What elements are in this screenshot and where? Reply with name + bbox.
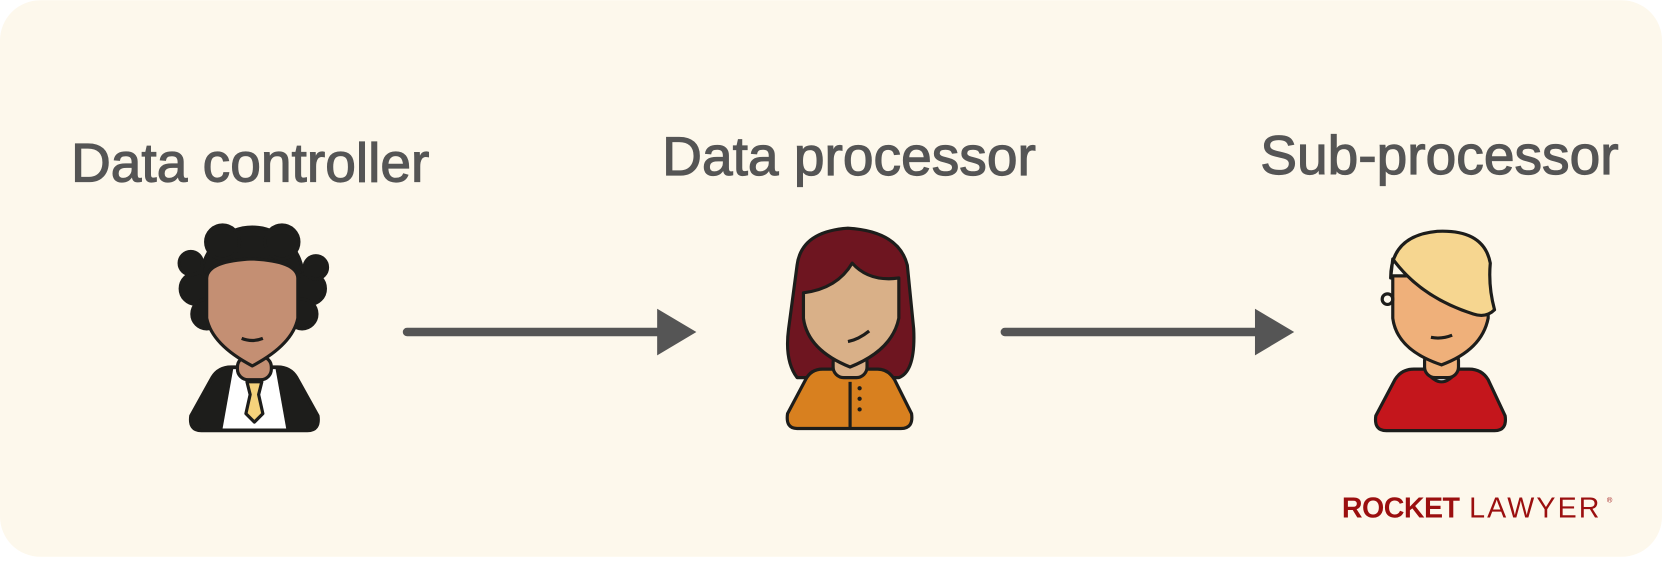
icon: data processor person <box>787 228 914 428</box>
arrow 1 <box>407 309 696 355</box>
icon: data controller person <box>179 225 328 431</box>
logo: rocket lawyer <box>1342 493 1613 525</box>
logo: rocket lawyer: ® <box>1607 496 1613 505</box>
heading: data processor: Data processor <box>662 125 1036 187</box>
heading: sub-processor: Sub-processor <box>1260 124 1619 186</box>
icon: sub-processor person <box>1376 231 1505 431</box>
heading: data controller: Data controller <box>71 132 429 194</box>
logo: rocket lawyer: LAWYER <box>1469 493 1602 525</box>
logo: rocket lawyer: ROCKET <box>1342 493 1461 525</box>
arrow 2 <box>1005 309 1294 355</box>
